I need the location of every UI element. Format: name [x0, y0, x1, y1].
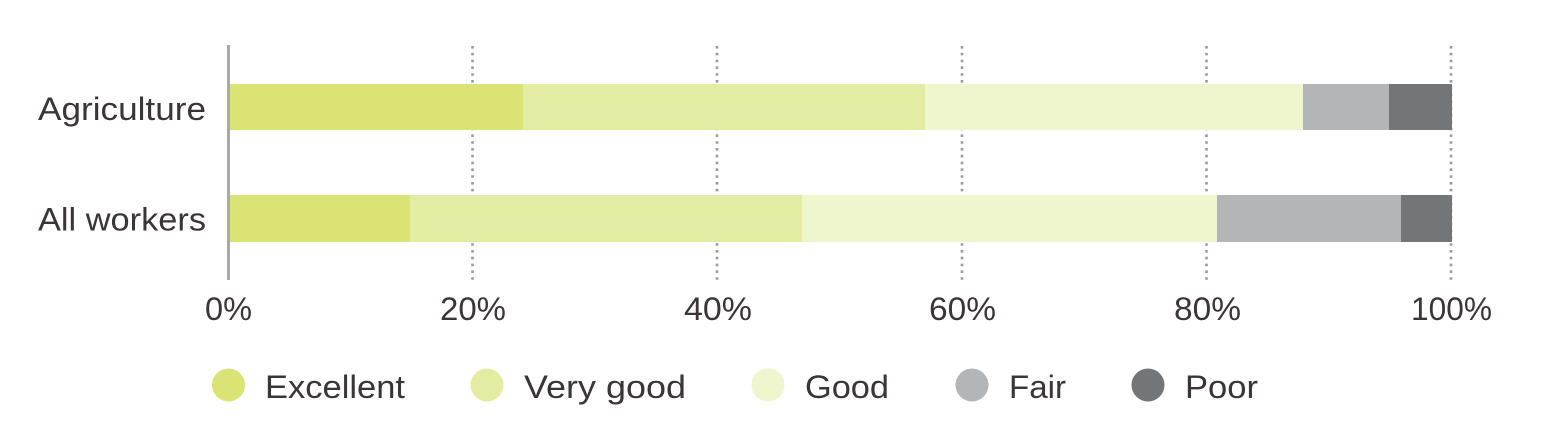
bar: Agriculture: [230, 84, 1452, 130]
bar: All workers: [230, 195, 1452, 242]
legend item: Good: [752, 368, 889, 405]
legend item: Very good: [470, 368, 686, 405]
legend item: Poor: [1132, 368, 1258, 405]
x axis labels: 60%: [929, 291, 996, 327]
x axis labels: [205, 291, 1492, 327]
legend item: Fair: Fair: [1009, 369, 1066, 405]
y axis line: [227, 45, 230, 280]
category labels: [38, 91, 206, 238]
x axis labels: 0%: [205, 291, 252, 327]
chart gridlines: [472, 46, 1451, 280]
category labels: All workers: [38, 202, 206, 238]
legend item: Good: Good: [805, 369, 889, 405]
x axis labels: 20%: [440, 291, 506, 327]
legend item: Excellent: [212, 368, 405, 405]
legend: [212, 368, 1258, 405]
x axis labels: 80%: [1174, 291, 1241, 327]
x axis labels: 40%: [684, 291, 752, 327]
x axis labels: 100%: [1411, 291, 1492, 327]
legend item: Fair: [956, 368, 1066, 405]
category labels: Agriculture: [38, 91, 206, 127]
legend item: Very good: Very good: [524, 369, 686, 405]
legend item: Excellent: Excellent: [265, 369, 405, 405]
legend item: Poor: Poor: [1185, 369, 1258, 405]
